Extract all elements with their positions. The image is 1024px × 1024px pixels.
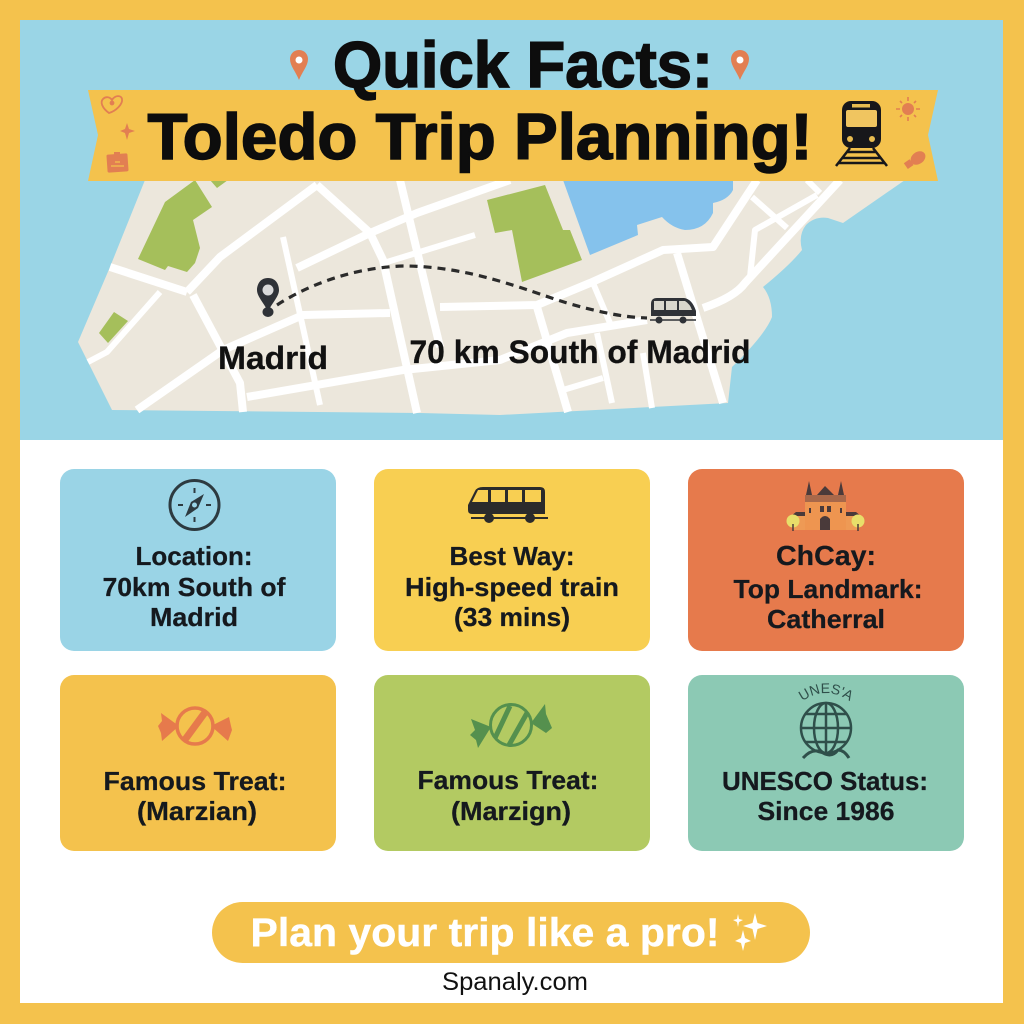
text: best way: (33 mins) [454, 602, 570, 632]
map: parks [99, 180, 582, 343]
text: famous treat: Famous Treat: [104, 766, 286, 796]
icon: right location pin [731, 50, 749, 80]
icon: heart [102, 96, 122, 113]
icon: sparkles [733, 913, 767, 951]
title: Toledo Trip Planning: Toledo Trip Planning! [148, 100, 812, 173]
icon: UNESCO globe [798, 683, 852, 759]
call to action text: Plan your trip like a pro! [250, 911, 720, 955]
text: famous treat: (Marzian) [137, 796, 257, 826]
icon: candy green [470, 704, 552, 748]
icon: cathedral [786, 481, 864, 531]
text: best way [405, 541, 619, 632]
text: location: Location: [136, 541, 252, 571]
text: UNESCO status: UNESCO Status: [722, 766, 928, 796]
map: lake [563, 180, 733, 255]
text: famous treat: (Marzign) [451, 796, 571, 826]
label: Madrid: Madrid [218, 340, 328, 376]
text: famous treat [418, 765, 598, 826]
text: location [102, 541, 286, 632]
text: best way: Best Way: [450, 541, 574, 571]
panel: map header [20, 20, 1003, 440]
banner ribbon [88, 90, 938, 181]
icon: sparkle [120, 123, 135, 140]
text: top landmark: ChCay: [776, 540, 876, 571]
text: location: 70km South of [102, 572, 286, 602]
card: top landmark [688, 469, 964, 651]
card: UNESCO status [688, 675, 964, 851]
text: top landmark [734, 540, 922, 634]
text: top landmark: Catherral [767, 604, 885, 634]
icon: train [836, 101, 887, 166]
text: UNESCO status: Since 1986 [758, 796, 894, 826]
map: dashed route [277, 266, 647, 318]
text: UNESCO status [722, 766, 928, 826]
icon: map bus [650, 298, 696, 324]
icon: clipboard [106, 152, 129, 173]
card: best way [374, 469, 650, 651]
icon: glove [904, 148, 928, 169]
icon: bus [468, 487, 548, 523]
title: Quick Facts: Quick Facts: [333, 28, 713, 101]
icon: UNESCO globe: UNES'A [798, 683, 852, 701]
text: best way: High-speed train [405, 572, 619, 602]
text: location: Madrid [150, 602, 238, 632]
icon: candy orange [158, 708, 232, 744]
icon: sun [896, 97, 920, 121]
text: famous treat [104, 766, 286, 826]
card: famous treat green [374, 675, 650, 851]
card: location [60, 469, 336, 651]
icon: Madrid map pin [257, 278, 279, 317]
icon: left location pin [290, 50, 308, 80]
map: land [78, 180, 905, 415]
call to action pill [212, 902, 810, 963]
icon: compass [170, 480, 219, 530]
footer: website: Spanaly.com [442, 968, 588, 996]
text: famous treat: Famous Treat: [418, 765, 598, 795]
text: top landmark: Top Landmark: [734, 574, 922, 604]
card: famous treat orange [60, 675, 336, 851]
label: distance: 70 km South of Madrid [410, 334, 750, 370]
map: roads [88, 180, 840, 413]
